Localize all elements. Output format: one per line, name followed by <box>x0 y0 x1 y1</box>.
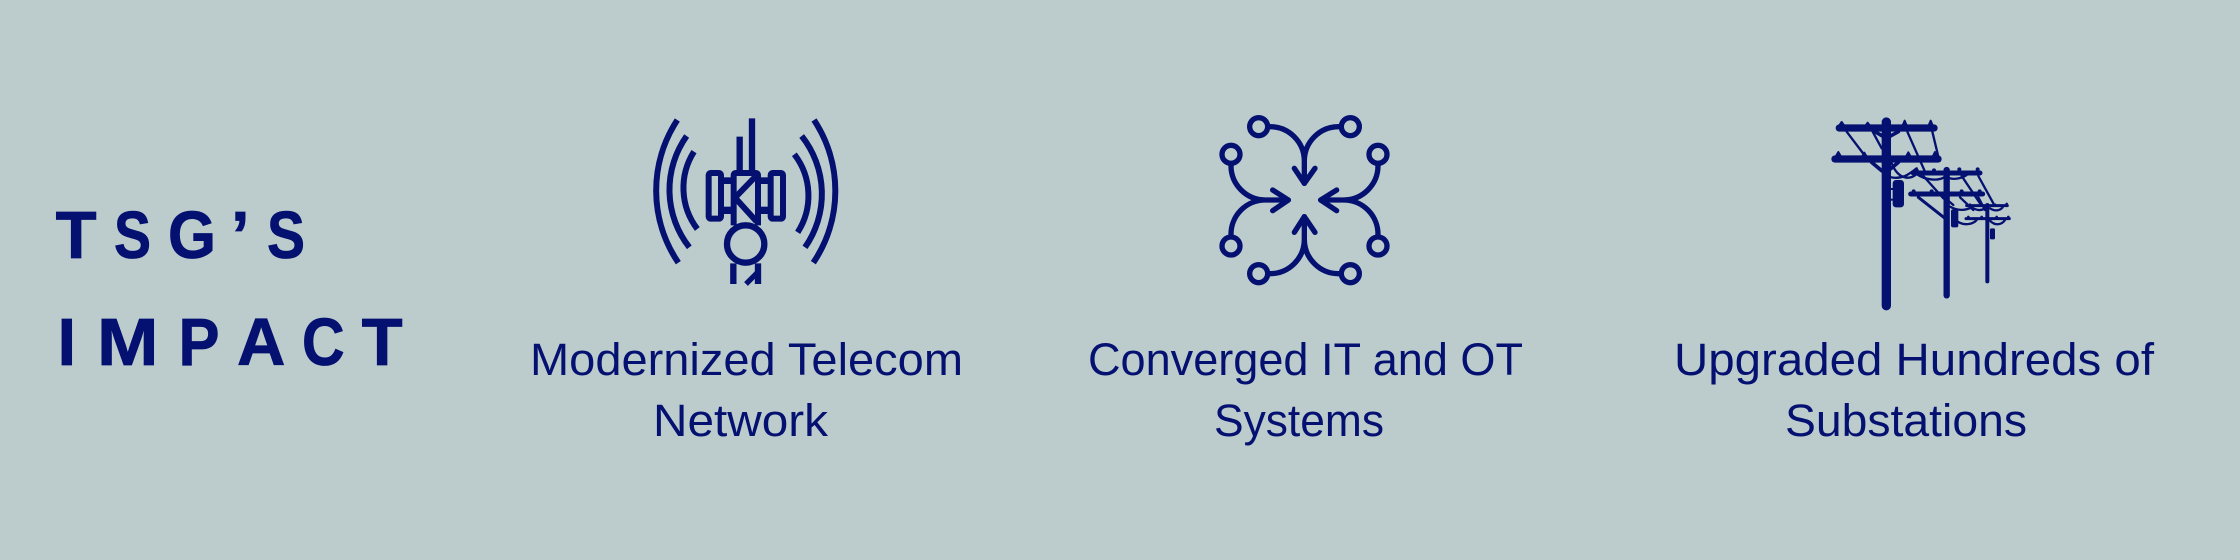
title: TSG's Impact: S <box>114 198 151 273</box>
caption: Converged IT and OT Systems: Converged IT and OT <box>1088 334 1523 385</box>
icon: converging arrows from eight nodes <box>1222 118 1387 283</box>
title: TSG's Impact: P <box>178 305 220 380</box>
title: TSG's Impact: C <box>302 305 345 380</box>
title: TSG's Impact: ’ <box>231 198 250 273</box>
caption: Upgraded Hundreds of Substations: Substations <box>1785 395 2027 446</box>
title: TSG's Impact <box>56 198 403 380</box>
caption: Modernized Telecom Network: Modernized Telecom <box>530 334 963 385</box>
caption: Modernized Telecom Network <box>530 334 963 446</box>
title: TSG's Impact: S <box>267 198 305 273</box>
caption: Modernized Telecom Network: Network <box>653 395 829 446</box>
caption: Upgraded Hundreds of Substations <box>1674 334 2155 446</box>
icon: row of utility poles <box>1835 121 2010 306</box>
caption: Converged IT and OT Systems <box>1088 334 1523 446</box>
icon: telecom tower with signal waves <box>656 118 835 284</box>
title: TSG's Impact: T <box>362 305 403 380</box>
title: TSG's Impact: M <box>97 305 158 380</box>
caption: Converged IT and OT Systems: Systems <box>1214 395 1384 446</box>
caption: Upgraded Hundreds of Substations: Upgraded Hundreds of <box>1674 334 2155 385</box>
title: TSG's Impact: I <box>58 305 76 380</box>
title: TSG's Impact: A <box>237 305 285 380</box>
title: TSG's Impact: T <box>56 198 97 273</box>
title: TSG's Impact: G <box>168 198 216 273</box>
